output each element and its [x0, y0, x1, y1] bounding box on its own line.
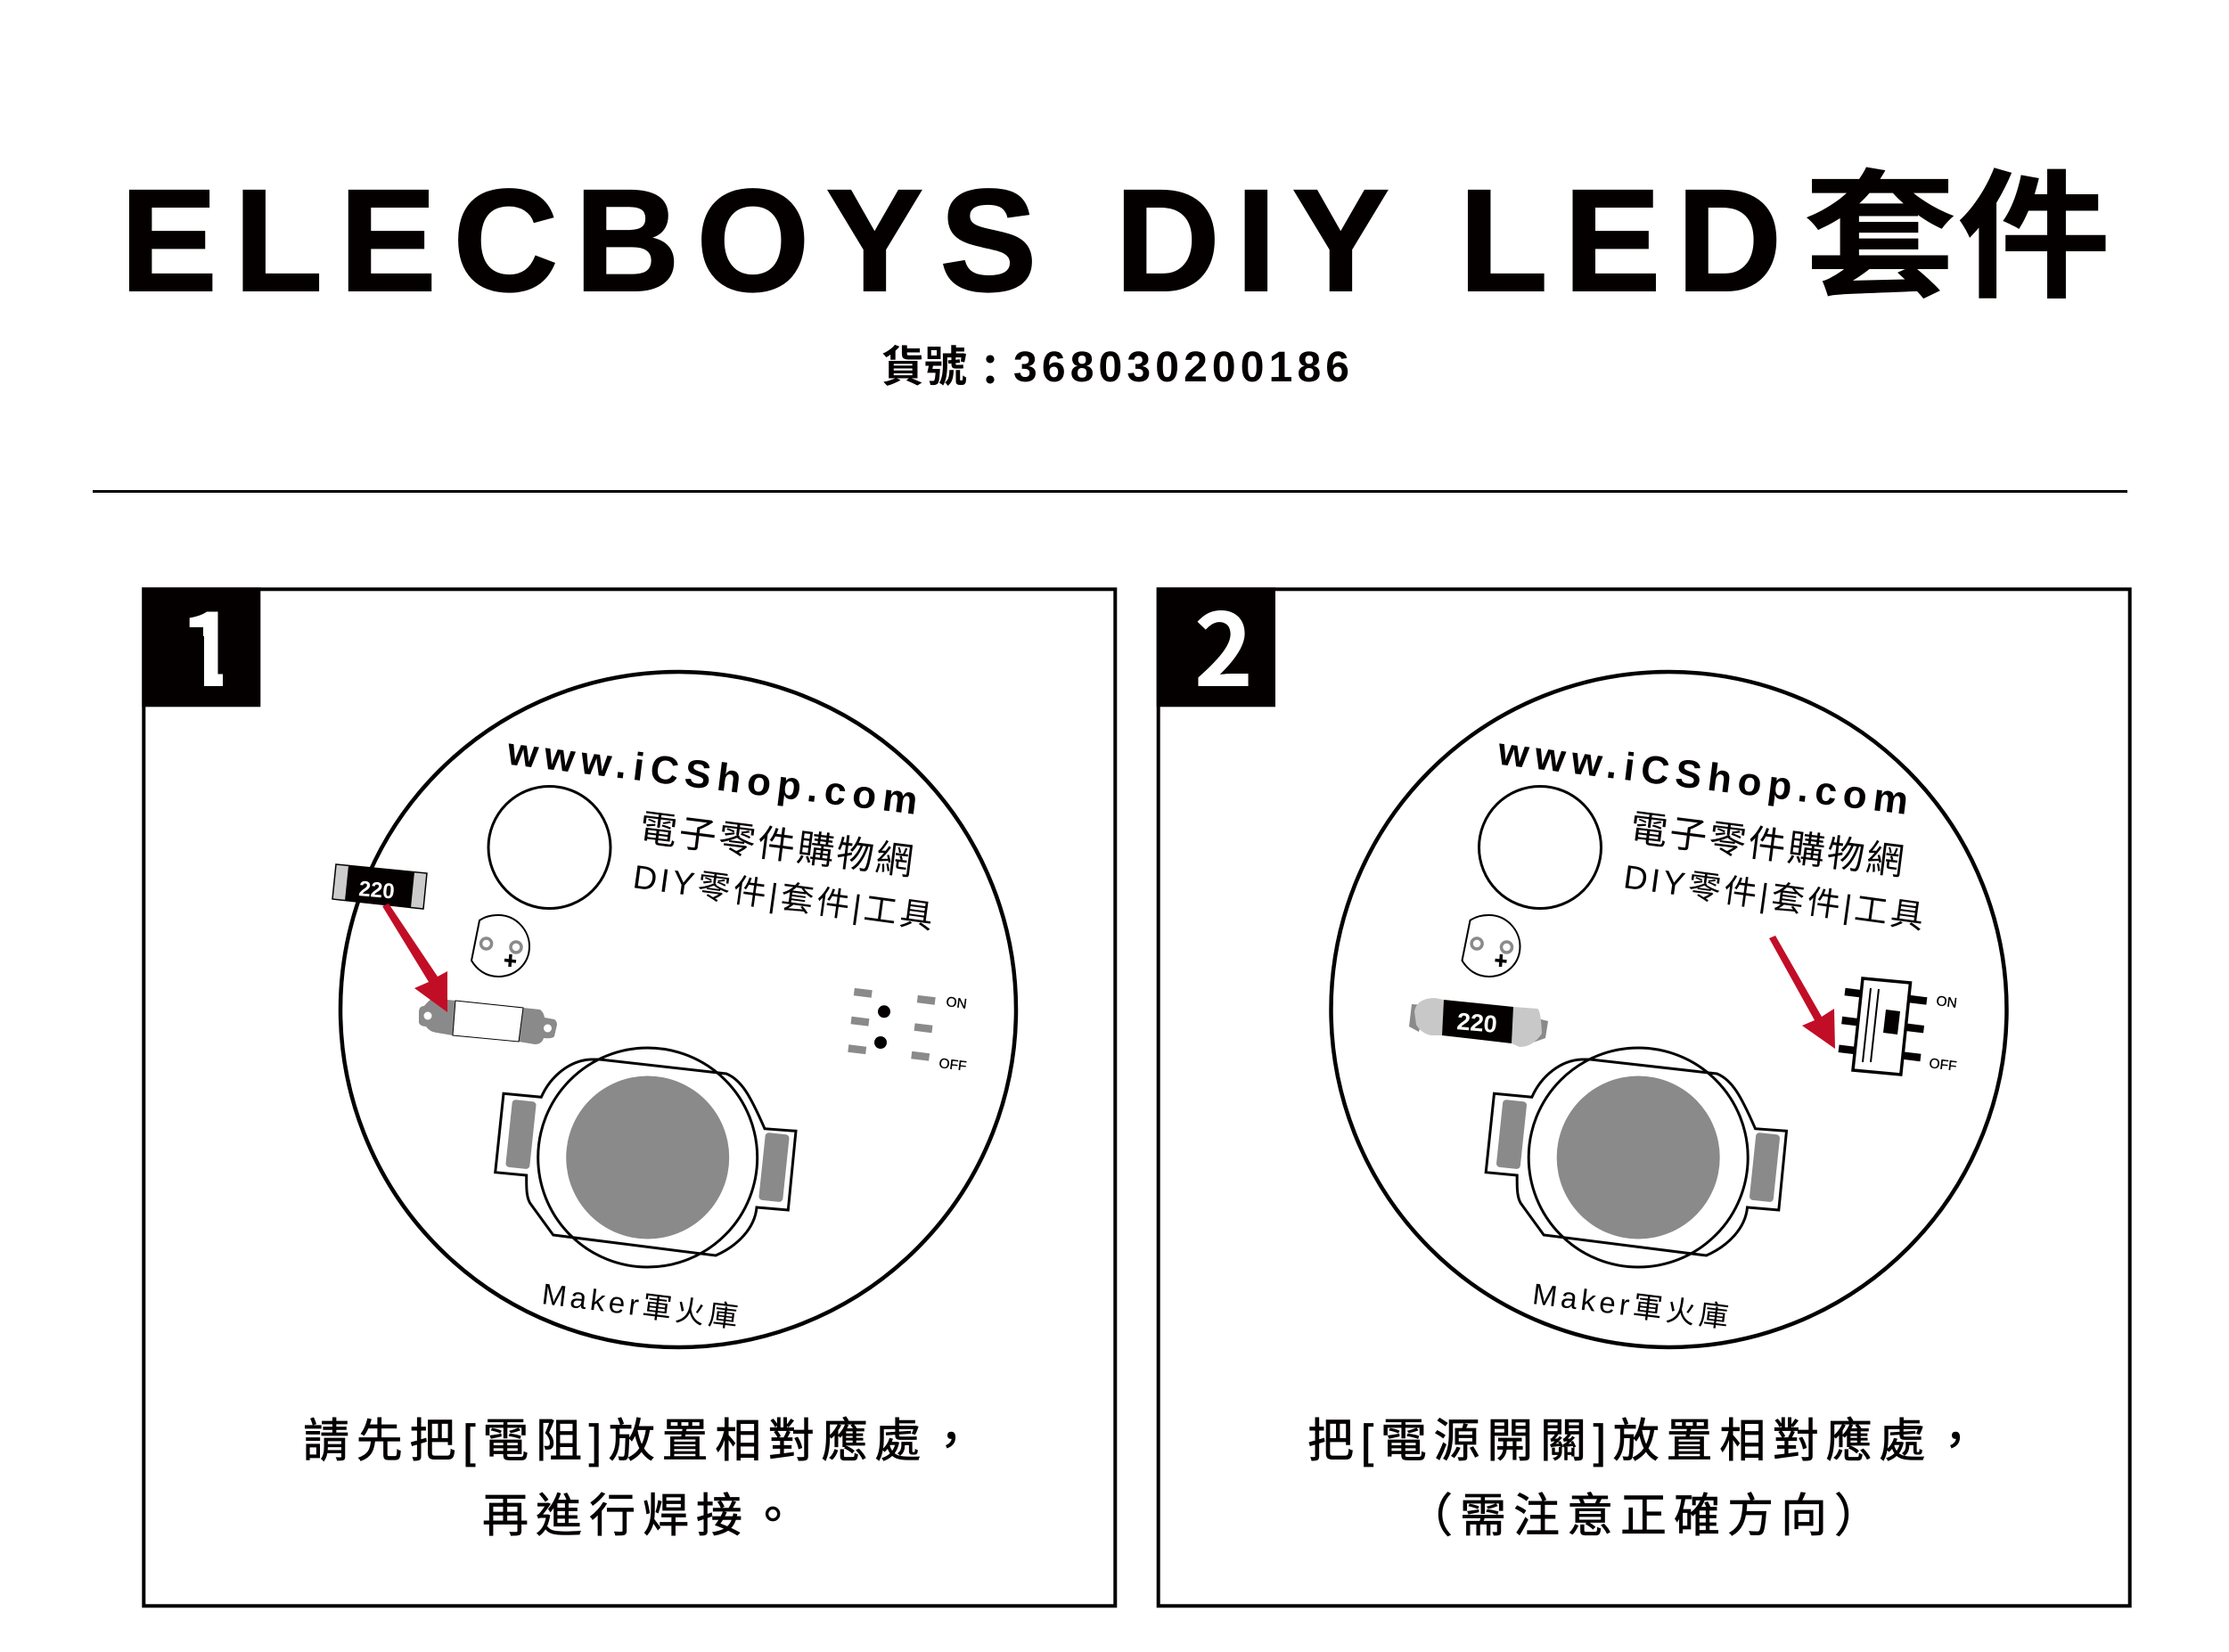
arrow: to power switch	[1769, 936, 1835, 1049]
switch footprint: OFF	[938, 1056, 967, 1075]
switch footprint: ON	[946, 994, 968, 1012]
arrow: to resistor pad	[382, 904, 447, 1012]
SMD resistor 220	[332, 864, 427, 909]
step 2 caption: （需注意正確方向）	[1406, 1491, 1888, 1542]
step 1 caption: 請先把[電阻]放置相對應處，	[303, 1416, 981, 1468]
switch footprint	[848, 988, 968, 1075]
divider line	[93, 490, 2127, 493]
mounted resistor 220: 220	[1455, 1008, 1498, 1038]
panel: step 1	[142, 569, 1115, 1606]
step number 1: 1	[179, 569, 238, 716]
disc: circuit board 1	[332, 672, 1016, 1347]
title: ELECBOYS	[120, 159, 1053, 322]
title: 套件	[1803, 159, 2110, 315]
disc footer text: Maker軍火庫	[540, 1277, 740, 1334]
disc footer text: Maker軍火庫	[1531, 1277, 1731, 1334]
item number: 貨號	[881, 344, 967, 391]
mounted resistor 220	[1409, 998, 1548, 1047]
step 1 caption: 再進行焊接。	[482, 1491, 803, 1542]
disc store name: 電子零件購物網	[637, 806, 915, 883]
power switch: OFF	[1929, 1056, 1957, 1075]
power switch	[1839, 978, 1958, 1075]
disc product line: DIY零件|套件|工具	[1621, 858, 1926, 936]
SMD resistor 220: 220	[357, 877, 396, 904]
item number: 368030200186	[1013, 344, 1349, 391]
title	[120, 159, 2110, 322]
step 2 caption	[1307, 1416, 1986, 1542]
power switch: ON	[1936, 994, 1958, 1011]
disc product line: DIY零件|套件|工具	[631, 858, 935, 936]
step 1 caption	[303, 1416, 981, 1542]
LED mounting circle	[488, 786, 611, 909]
item number: ：	[969, 348, 1012, 395]
item number	[881, 344, 1349, 395]
step 2 caption: 把[電源開關]放置相對應處，	[1307, 1416, 1986, 1468]
coin cell holder	[496, 1048, 796, 1267]
resistor pad	[419, 998, 557, 1044]
coin cell holder	[1486, 1048, 1786, 1267]
disc website text: www.iCShop.com	[504, 730, 920, 823]
disc website text: www.iCShop.com	[1495, 730, 1911, 823]
title: DIY LED	[1115, 159, 1798, 322]
step number 2: 2	[1194, 569, 1253, 716]
capacitor footprint	[471, 915, 529, 977]
disc: circuit board 2	[1332, 672, 2007, 1347]
panel: step 2	[1157, 569, 2130, 1606]
disc store name: 電子零件購物網	[1627, 806, 1906, 883]
LED mounting circle	[1479, 786, 1601, 909]
step number 2	[1157, 569, 1275, 716]
step number 1	[142, 587, 260, 707]
capacitor footprint	[1462, 915, 1520, 977]
